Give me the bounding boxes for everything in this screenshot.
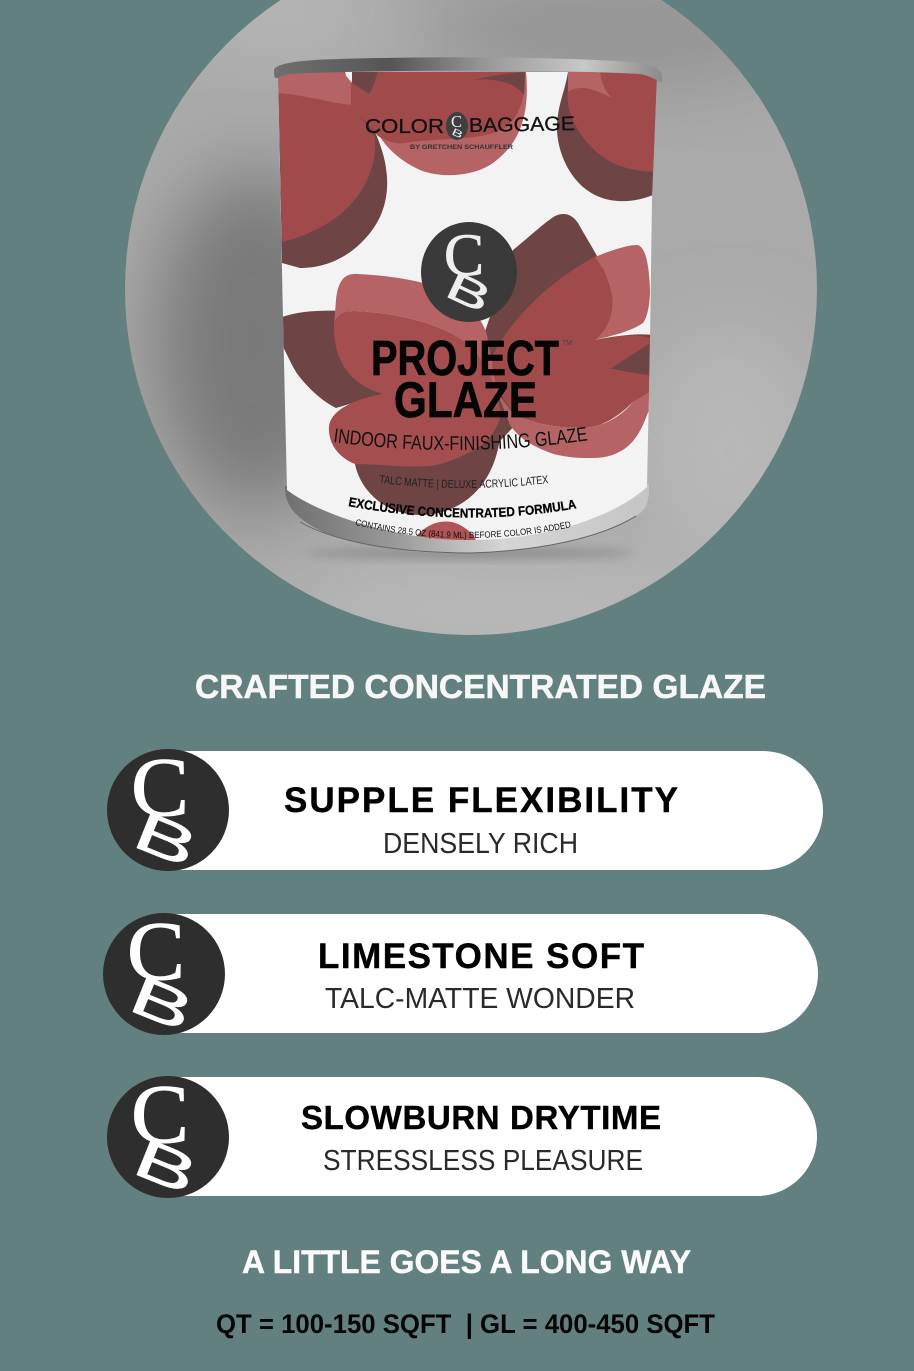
icon: CB logo <box>107 1068 229 1206</box>
logo: Color Baggage wordmark: C <box>451 112 462 131</box>
icon: CB logo: B <box>122 963 202 1043</box>
icon: CB logo: C <box>131 1068 189 1161</box>
icon: CB logo: B <box>126 799 206 879</box>
can title <box>371 332 572 428</box>
logo: Color Baggage wordmark: BY GRETCHEN SCHAUFFLER <box>410 145 514 151</box>
can subtitle: INDOOR FAUX-FINISHING GLAZE <box>334 426 588 450</box>
logo: Color Baggage wordmark: COLOR <box>365 116 444 138</box>
logo badge on can <box>421 222 517 322</box>
feature title: LIMESTONE SOFT <box>318 937 644 976</box>
icon: CB logo: C <box>127 905 185 998</box>
paint can <box>274 57 662 554</box>
logo: Color Baggage wordmark: BAGGAGE <box>469 113 575 137</box>
logo: Color Baggage wordmark: B <box>450 127 465 142</box>
icon: CB logo: C <box>131 741 189 834</box>
icon: CB logo <box>107 741 229 879</box>
icon: CB logo: B <box>126 1126 206 1206</box>
product photo circle <box>120 0 820 655</box>
pill background <box>168 1077 817 1196</box>
icon: CB logo <box>103 905 225 1043</box>
petal: centre right <box>483 214 660 458</box>
coverage line: QT = 100-150 SQFT | GL = 400-450 SQFT <box>216 1309 715 1339</box>
petal: top centre <box>351 72 527 175</box>
heading: CRAFTED CONCENTRATED GLAZE <box>195 668 766 705</box>
feature subtitle: STRESSLESS PLEASURE <box>323 1145 643 1177</box>
pill background <box>168 751 823 870</box>
can title: TM <box>562 340 572 347</box>
can formula line: EXCLUSIVE CONCENTRATED FORMULA <box>348 497 577 518</box>
feature title: SLOWBURN DRYTIME <box>301 1099 661 1136</box>
can label <box>278 72 657 540</box>
petal: top right <box>557 72 660 201</box>
can title: PROJECT <box>371 332 559 386</box>
feature pill: slowburn drytime <box>107 1068 817 1206</box>
top rim <box>274 57 662 82</box>
feature pill: supple flexibility <box>107 741 823 879</box>
feature subtitle: DENSELY RICH <box>383 828 578 860</box>
tagline: A LITTLE GOES A LONG WAY <box>242 1244 691 1280</box>
can finish line: TALC MATTE | DELUXE ACRYLIC LATEX <box>380 475 548 490</box>
logo: Color Baggage wordmark <box>365 112 575 151</box>
petal: lower left <box>282 274 501 515</box>
logo badge on can: B <box>439 263 498 322</box>
logo badge on can: C <box>444 222 484 288</box>
feature pill: limestone soft <box>103 905 818 1043</box>
feature subtitle: TALC-MATTE WONDER <box>325 983 635 1015</box>
petal: bottom <box>416 522 476 540</box>
can title: GLAZE <box>394 372 537 428</box>
pill background <box>164 914 818 1033</box>
feature title: SUPPLE FLEXIBILITY <box>284 781 678 820</box>
can bottom rim <box>285 484 649 553</box>
can contents line: CONTAINS 28.5 OZ (841.9 ML) BEFORE COLOR IS ADDED <box>356 520 570 540</box>
petal: top left <box>278 72 387 268</box>
